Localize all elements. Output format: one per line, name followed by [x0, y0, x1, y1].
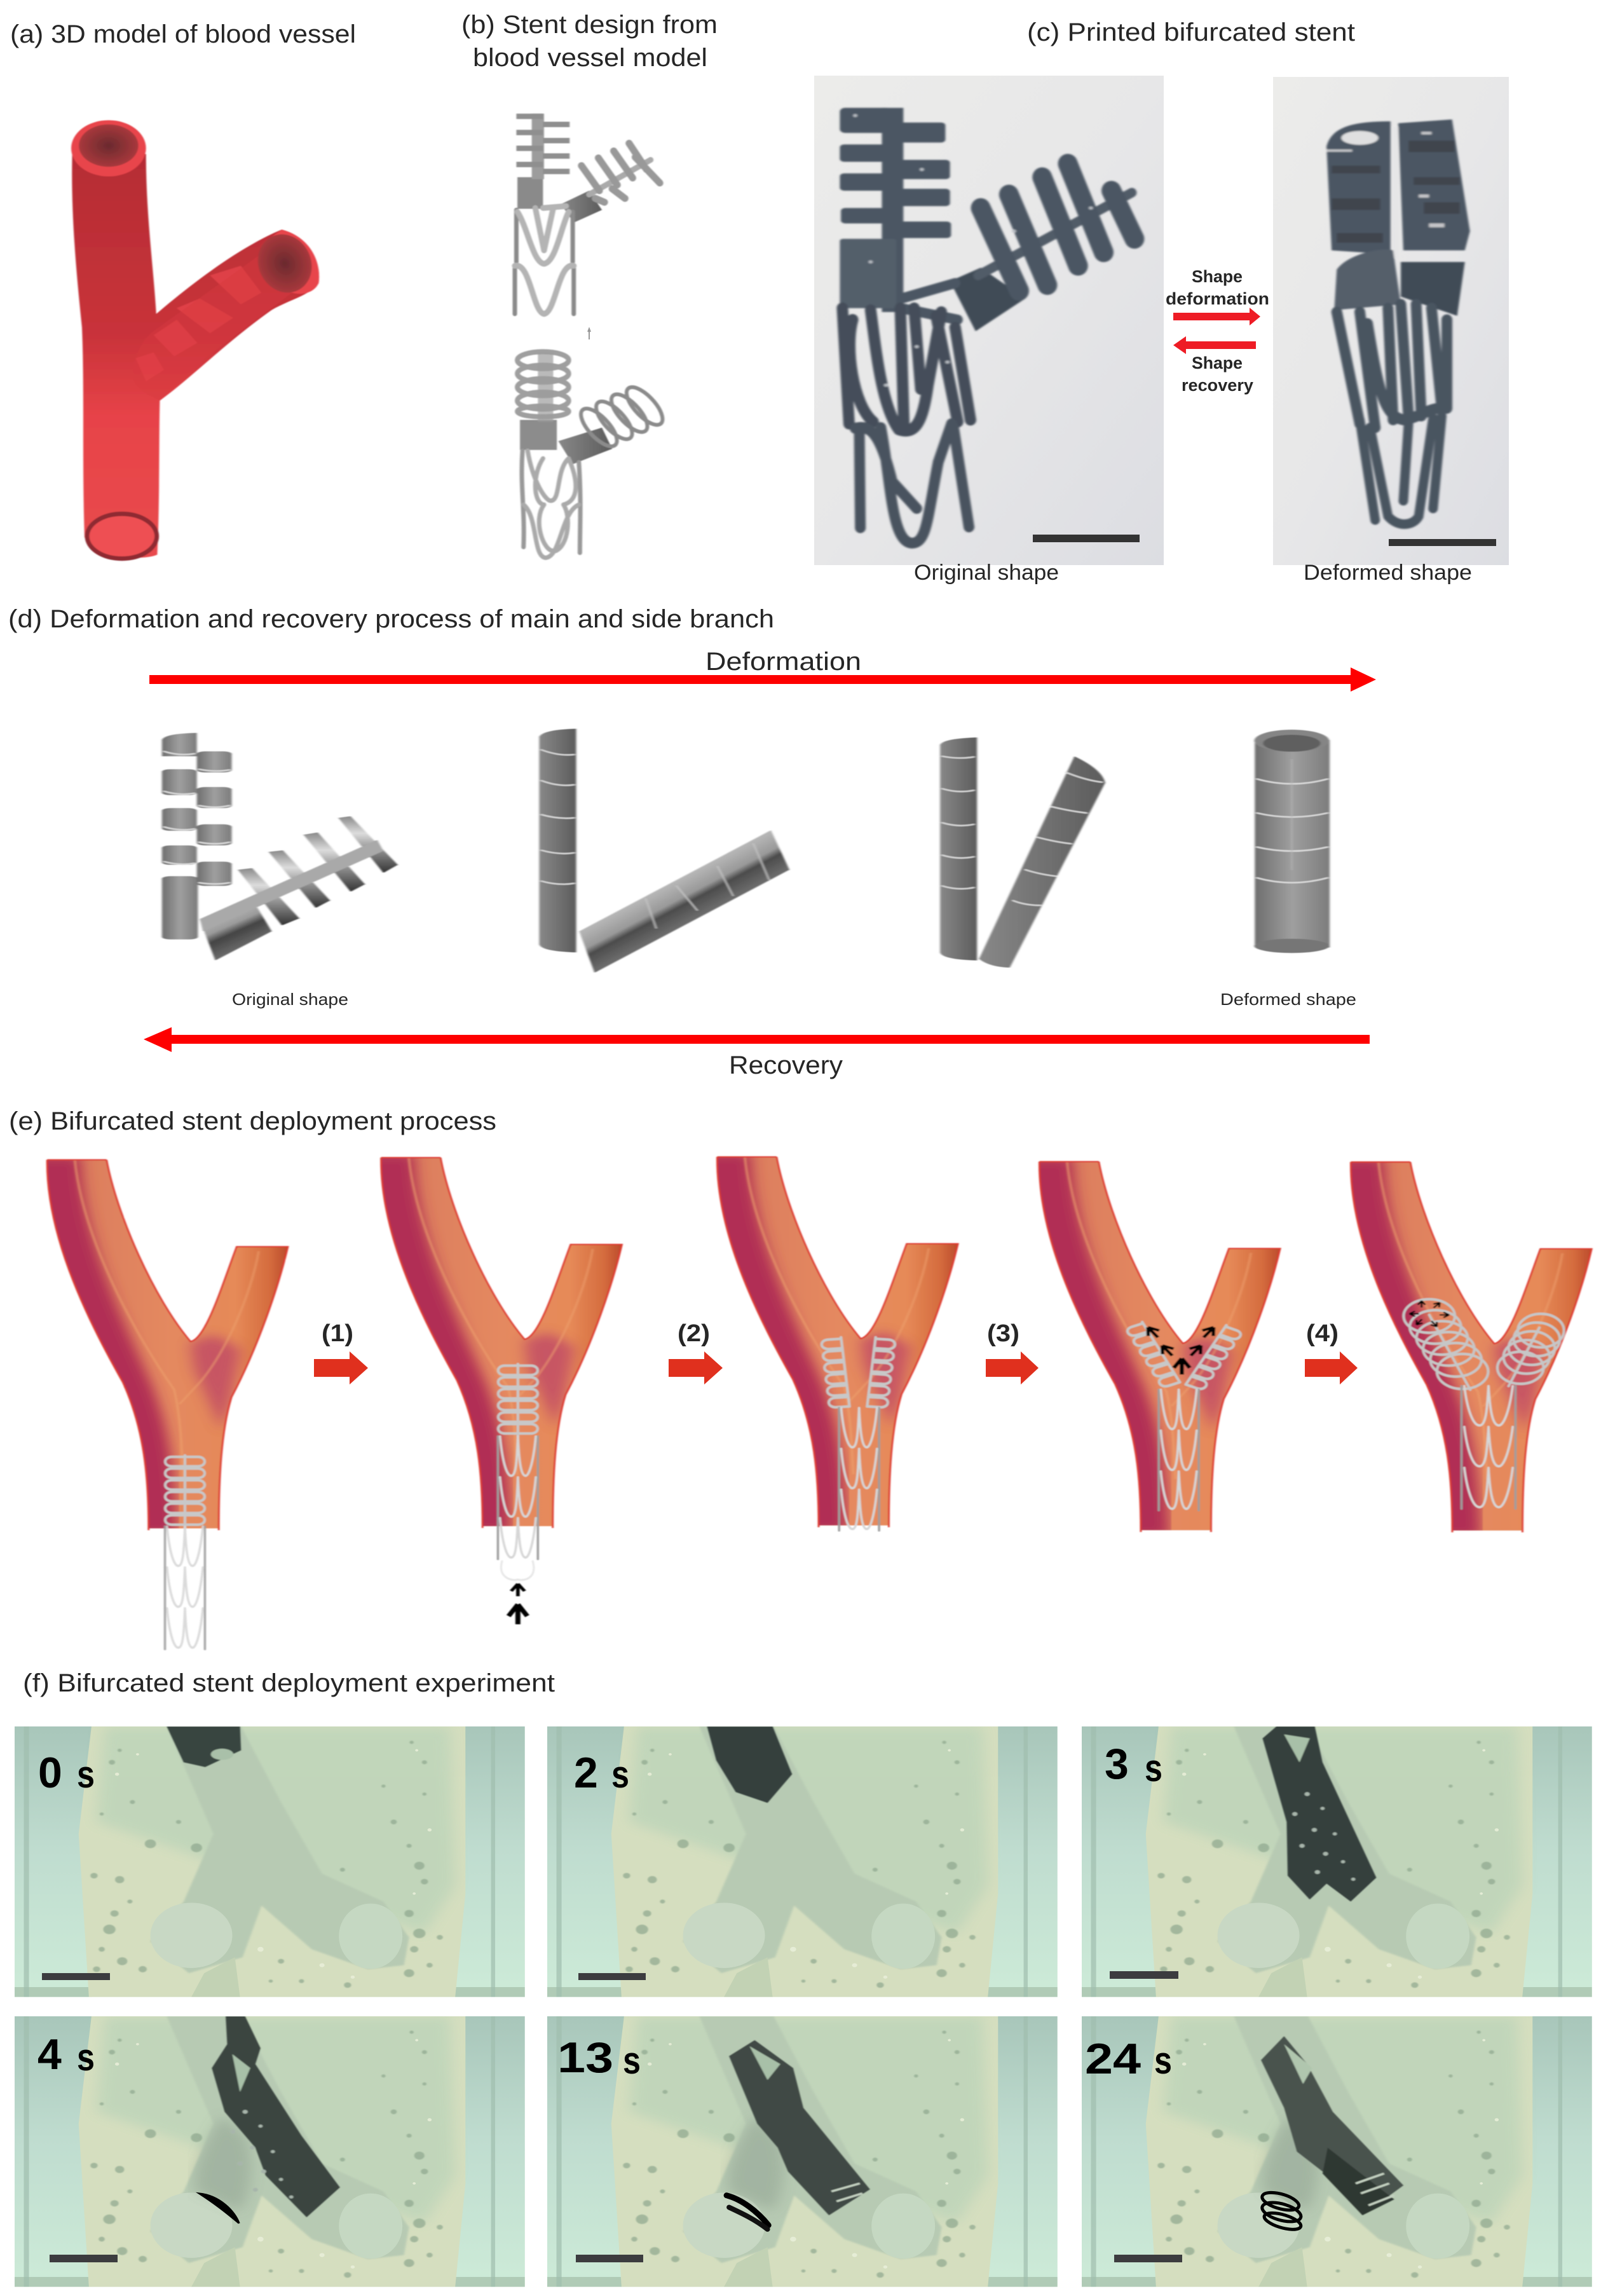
photo: original shape stent — [814, 76, 1164, 565]
label: Deformed shape: Deformed shape — [1304, 561, 1472, 585]
time label — [38, 1749, 95, 1797]
coil in side branch — [726, 2196, 768, 2229]
step label (4): (4) — [1306, 1320, 1339, 1347]
small arrow between designs — [588, 329, 590, 339]
side branch opening — [261, 229, 319, 294]
time label — [574, 1749, 629, 1797]
time label: s — [77, 1753, 95, 1796]
time label — [1085, 2035, 1172, 2083]
scale bar — [1033, 535, 1140, 542]
radial arrows — [1409, 1301, 1449, 1328]
stage 4: deformed shape — [1255, 730, 1330, 953]
time label: s — [623, 2039, 641, 2082]
heading: panel a: (a) 3D model of blood vessel — [10, 20, 356, 48]
scale bar — [576, 2255, 643, 2262]
time label: 0 — [38, 1749, 62, 1797]
photo frame 13 s — [547, 2016, 1058, 2287]
arrow 3 — [986, 1351, 1039, 1384]
step 2: stent branches split — [717, 1153, 958, 1533]
photo frame 2 s — [547, 1726, 1058, 1997]
lower opening — [87, 514, 157, 559]
step 3: branches splayed — [1039, 1158, 1280, 1538]
arrow: shape recovery — [1173, 336, 1256, 354]
printed stent, original — [840, 108, 1134, 543]
scale bar — [1110, 1971, 1178, 1979]
heading: panel d: (d) Deformation and recovery process of main and side branch — [8, 605, 774, 633]
step label (3): (3) — [987, 1320, 1019, 1347]
time label: 4 — [37, 2030, 62, 2079]
panel b: flat stent design — [515, 114, 660, 314]
step 1: stent advanced in vessel — [381, 1154, 622, 1624]
coil in side branch — [199, 2194, 239, 2224]
panel b: rolled stent design — [517, 352, 669, 557]
heading: panel b — [461, 11, 718, 72]
photo frame 4 s — [15, 2016, 525, 2287]
step 0: vessel with stent at entrance — [47, 1156, 288, 1649]
arrow 2 — [669, 1351, 723, 1384]
label: Shape recovery: recovery — [1182, 376, 1253, 395]
stent at top — [167, 1726, 241, 1767]
time label — [1105, 1740, 1162, 1789]
scale bar — [50, 2255, 118, 2262]
branch stripes — [136, 266, 261, 381]
step 4: stent fully expanded — [1351, 1158, 1591, 1538]
time label: 13 — [557, 2033, 613, 2082]
photo: deformed shape stent — [1273, 77, 1509, 565]
time label: 3 — [1105, 1740, 1129, 1788]
scale bar — [42, 1973, 110, 1980]
stage 3 — [940, 737, 1105, 967]
label: Shape recovery: Shape — [1192, 353, 1243, 372]
label: Original shape small: Original shape — [232, 990, 348, 1009]
step label (2): (2) — [678, 1320, 710, 1347]
photo frame 0 s — [15, 1726, 525, 1997]
coil in side branch — [1260, 2190, 1303, 2231]
time label: 2 — [574, 1749, 598, 1797]
label: Deformation: Deformation — [705, 648, 861, 676]
label: Shape deformation — [1166, 267, 1269, 308]
heading: panel c: (c) Printed bifurcated stent — [1027, 18, 1355, 46]
time label: s — [1154, 2039, 1172, 2082]
label: Shape recovery — [1182, 353, 1253, 395]
printed stent, deformed — [1326, 120, 1470, 524]
label: Original shape: Original shape — [914, 561, 1059, 585]
heading: panel b: (b) Stent design from — [461, 11, 718, 39]
vessel body — [72, 154, 319, 557]
push arrows — [1143, 1325, 1219, 1374]
label: Shape deformation: deformation — [1166, 289, 1269, 308]
heading: panel e: (e) Bifurcated stent deployment process — [9, 1107, 496, 1135]
stent at bifurcation — [1263, 1726, 1376, 1901]
scale bar — [1114, 2255, 1182, 2262]
label: Recovery: Recovery — [729, 1051, 843, 1079]
upper opening — [71, 120, 146, 177]
stage 1: original shape — [162, 733, 398, 960]
scale bar — [1389, 539, 1496, 546]
time label — [37, 2030, 95, 2079]
arrow: deformation — [149, 667, 1376, 692]
arrow 4 — [1305, 1351, 1358, 1384]
label: Shape deformation: Shape — [1192, 267, 1243, 286]
expanding stent — [728, 2040, 870, 2215]
heading: panel f: (f) Bifurcated stent deployment experiment — [23, 1669, 555, 1697]
photo frame 3 s — [1082, 1726, 1592, 1997]
panel a: 3D blood vessel model — [71, 120, 319, 559]
stent entering — [707, 1726, 792, 1803]
time label: s — [611, 1753, 629, 1796]
push arrows — [508, 1584, 528, 1624]
stent and rod — [195, 2016, 340, 2217]
label: Deformed shape small: Deformed shape — [1220, 990, 1356, 1009]
scale bar — [578, 1973, 646, 1980]
time label: s — [1145, 1747, 1162, 1789]
arrow: shape deformation — [1173, 308, 1260, 325]
arrow 1 — [314, 1351, 368, 1384]
stage 2 — [539, 728, 789, 973]
deployed stent — [1261, 2036, 1403, 2215]
time label — [557, 2033, 641, 2082]
side branch of stage 1 — [200, 816, 398, 960]
heading: panel b: blood vessel model — [473, 44, 707, 72]
photo frame 24 s — [1082, 2016, 1592, 2287]
time label: 24 — [1085, 2035, 1141, 2083]
arrow: recovery — [144, 1027, 1370, 1052]
step label (1): (1) — [322, 1320, 353, 1347]
time label: s — [77, 2036, 95, 2079]
